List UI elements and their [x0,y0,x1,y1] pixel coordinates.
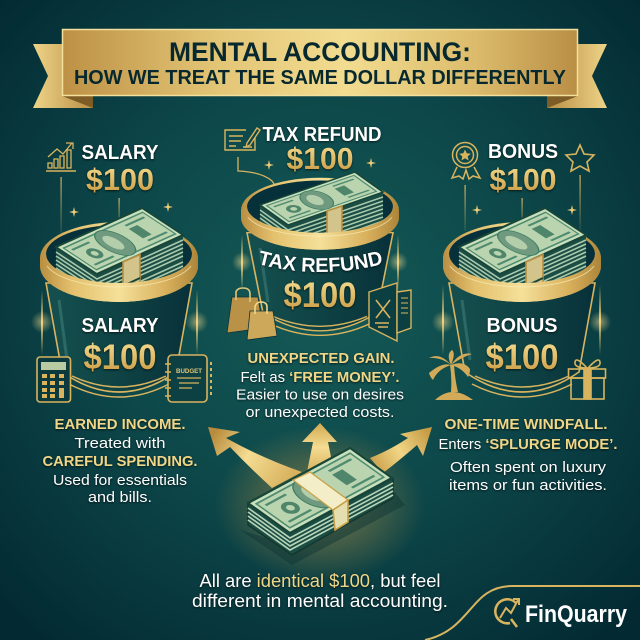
icon: calculator [37,357,70,402]
description: salary: and bills. [88,489,152,506]
title text: MENTAL ACCOUNTING: [169,37,471,67]
icon: palm tree [429,350,473,400]
panel: salary [37,142,211,506]
bucket label: bonus [486,315,558,377]
description: tax refund: Felt as ‘FREE MONEY’. [240,369,400,386]
arrow: to bonus [370,427,432,473]
description: bonus: ONE-TIME WINDFALL. [444,416,608,433]
icon: shopping bags [227,288,277,340]
title banner [33,30,607,108]
bucket label: tax refund: TAX REFUND [260,250,382,274]
description: tax refund: Easier to use on desires [236,386,404,404]
panel: bonus [429,141,618,494]
bucket: salary [40,208,198,397]
description: tax refund: UNEXPECTED GAIN. [248,350,394,367]
icon: budget notebook [165,355,211,402]
icon: medal [452,142,480,179]
bucket label: bonus: BONUS [486,315,558,337]
description: salary: CAREFUL SPENDING. [42,453,198,470]
summary text [192,571,448,611]
description: bonus: Enters ‘SPLURGE MODE’. [438,436,618,453]
description: salary: Used for essentials [53,472,187,489]
bucket label: salary: SALARY [82,315,159,337]
bucket label: tax refund: $100 [284,276,356,315]
logo text: FinQuarry [525,601,628,628]
logo: FinQuarry [495,599,628,628]
arrow: to salary [208,427,302,488]
amount: salary: $100 [86,162,154,197]
summary text: All are identical $100, but feel [200,571,440,591]
summary text: different in mental accounting. [192,591,448,611]
bucket: bonus [443,208,601,397]
bucket label: bonus: $100 [486,338,558,377]
glow behind central stack [215,427,425,583]
description: bonus: Often spent on luxury [450,459,607,476]
icon: tax check [225,128,278,195]
heading: salary: SALARY [82,142,159,164]
panel: tax refund [224,124,412,422]
beams and sparkles [31,158,611,355]
icon: gift [568,360,606,399]
bucket: tax refund [241,172,399,335]
description: bonus [438,416,618,494]
icon: star [566,145,594,171]
arrow: to tax refund [302,423,337,472]
heading: bonus: BONUS [488,141,558,163]
bucket label: salary: $100 [84,338,156,377]
description: salary [42,416,198,506]
amount: tax refund: $100 [286,141,354,176]
central money stack [240,448,405,565]
icon: menu [369,283,411,341]
bucket label: salary [82,315,159,377]
title text: HOW WE TREAT THE SAME DOLLAR DIFFERENTLY [74,66,566,89]
description: salary: EARNED INCOME. [54,416,186,433]
icon: growth chart [46,143,76,171]
logo curve [425,586,640,640]
description: tax refund [236,350,404,421]
icon: logo mark [495,599,519,627]
description: tax refund: or unexpected costs. [246,404,394,421]
bucket label: tax refund [260,250,382,315]
description: salary: Treated with [74,435,166,452]
title text [74,37,566,89]
amount: bonus: $100 [490,162,556,197]
description: bonus: items or fun activities. [449,477,607,494]
heading: tax refund: TAX REFUND [262,124,382,146]
icon: budget notebook: BUDGET [176,368,202,375]
